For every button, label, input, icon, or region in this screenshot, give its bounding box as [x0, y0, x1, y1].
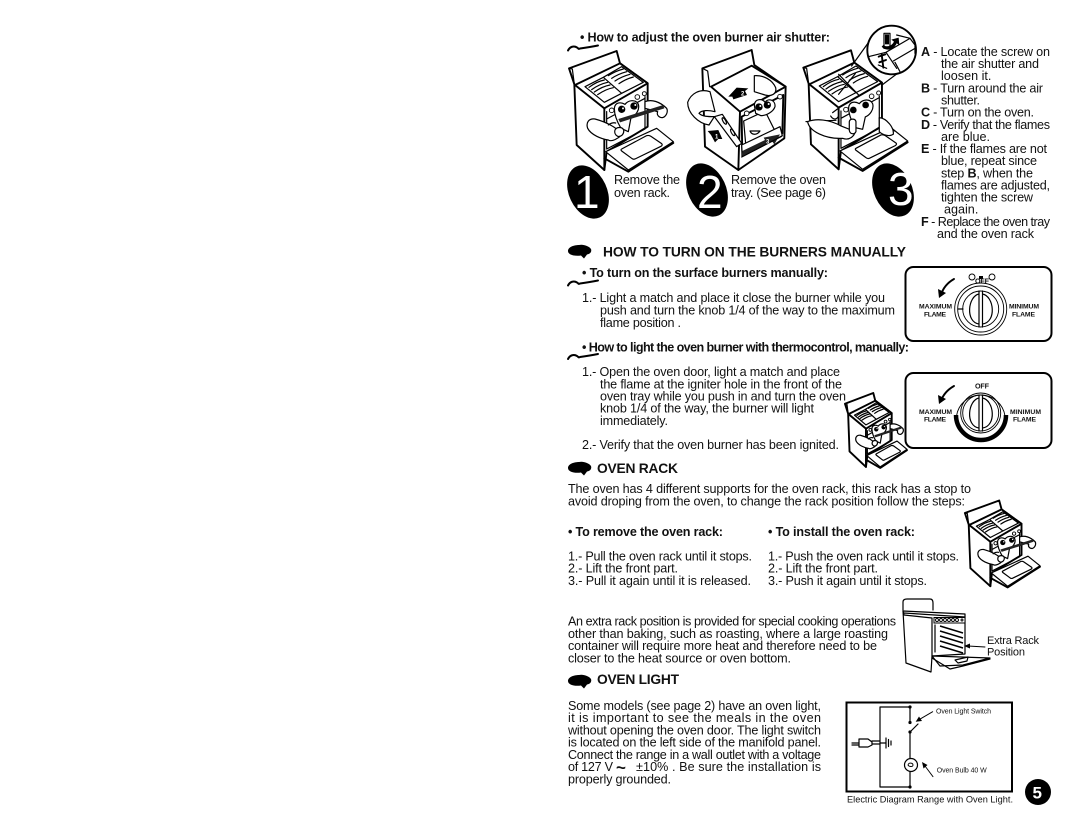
step 2 text: Remove the oven: [731, 173, 826, 187]
heading: burners manually: HOW TO TURN ON THE BURNERS MANUALLY: [603, 244, 906, 260]
step 1 text: [614, 173, 680, 200]
arrow 1: [708, 130, 722, 142]
knob panel: surface burner: FLAME: [1012, 312, 1035, 319]
instructions A to F: step B, when the: [941, 166, 1033, 180]
step 1 text: oven rack.: [614, 186, 670, 200]
knob panel: surface burner: FLAME: [924, 312, 946, 319]
knob panel: surface burner: [906, 267, 1052, 341]
step badge 3: 3: [888, 163, 914, 215]
oven light text: Connect the range in a wall outlet with a voltage: [568, 748, 821, 762]
knob panel: oven thermocontrol: FLAME: [1013, 417, 1036, 424]
column: remove the rack: • To remove the oven rack:: [568, 525, 723, 539]
oven rack intro: The oven has 4 different supports for the oven rack, this rack has a stop to: [568, 482, 971, 496]
instructions A to F: and the oven rack: [937, 227, 1035, 241]
extra rack text: An extra rack position is provided for special cooking operations: [568, 615, 896, 629]
plug: [852, 738, 891, 748]
instructions A to F: C - Turn on the oven.: [921, 106, 1034, 120]
diagram caption: Electric Diagram Range with Oven Light.: [847, 795, 1013, 805]
instructions A to F: shutter.: [941, 94, 980, 108]
knob panel: surface burner: OFF: [975, 276, 990, 286]
extra rack text: other than baking, such as roasting, where a large roasting: [568, 627, 888, 641]
heading: oven rack: OVEN RACK: [597, 461, 678, 476]
oven light text: [567, 699, 821, 786]
extra rack text: [568, 615, 896, 666]
column: install the rack: 1.- Push the oven rack until it stops.: [768, 550, 959, 564]
surface burners text: push and turn the knob 1/4 of the way to the maximum: [600, 304, 895, 318]
illustration: small oven: [845, 393, 907, 468]
column: remove the rack: 2.- Lift the front part.: [568, 562, 678, 576]
oven light text: properly grounded.: [568, 772, 671, 786]
heading: oven light: OVEN LIGHT: [597, 672, 680, 687]
oven rack intro: [568, 482, 971, 509]
instructions A to F: F - Replace the oven tray: [921, 215, 1051, 229]
illustration: oven step 2: 2: [741, 91, 745, 97]
knob panel: oven thermocontrol: OFF: [975, 382, 990, 390]
instructions A to F: blue, repeat since: [941, 154, 1037, 168]
instructions A to F: B - Turn around the air: [921, 82, 1043, 96]
illustration: oven step 2: 1: [715, 134, 719, 140]
instructions A to F: the air shutter and: [941, 57, 1039, 71]
instructions A to F: tighten the screw: [941, 191, 1034, 205]
step badge 1: 1: [574, 166, 600, 218]
subheading: air shutter: [568, 31, 830, 50]
heading: oven light: [568, 672, 680, 688]
bulb: [904, 758, 918, 772]
step 1 text: Remove the: [614, 173, 680, 187]
inset circle detail: [867, 26, 916, 74]
subheading: oven burner thermocontrol: • How to light the oven burner with thermocontrol, manually:: [582, 340, 909, 354]
oven light text: it is important to see the meals in the oven: [568, 711, 821, 725]
column: remove the rack: 3.- Pull it again until it is released.: [568, 574, 751, 588]
knob panel: oven thermocontrol: MAXIMUM: [919, 409, 952, 416]
illustration: oven step 3 with inset: [803, 50, 908, 171]
instructions A to F: D - Verify that the flames: [921, 118, 1050, 132]
illustration: oven step 2: [688, 50, 786, 170]
oven light text: without opening the oven door. The light switch: [567, 724, 821, 738]
column: install the rack: 2.- Lift the front part.: [768, 562, 878, 576]
electric diagram: Oven Bulb 40 W: [937, 768, 987, 775]
oven burner text: [582, 365, 846, 452]
step badge 1: [559, 159, 617, 225]
knob panel: surface burner: MINIMUM: [1009, 304, 1039, 311]
subheading: surface burners: [568, 266, 828, 286]
oven burner text: the flame at the igniter hole in the front of the: [600, 377, 842, 391]
oven burner text: immediately.: [600, 414, 668, 428]
surface burners text: [582, 291, 895, 330]
extra rack text: closer to the heat source or oven bottom.: [568, 652, 791, 666]
step 2 text: [731, 173, 826, 200]
electric diagram: Oven Light Switch: [936, 709, 991, 716]
subheading: air shutter: • How to adjust the oven burner air shutter:: [580, 31, 830, 45]
electric diagram: [846, 702, 1012, 792]
subheading: surface burners: • To turn on the surface burners manually:: [582, 266, 828, 280]
label: extra rack position: Position: [987, 647, 1025, 659]
surface burners text: flame position .: [600, 316, 681, 330]
knob panel: surface burner: MAXIMUM: [919, 304, 952, 311]
step badge 3: [864, 157, 922, 223]
oven light text: of 127 V: [568, 760, 614, 774]
knob panel: oven thermocontrol: [906, 373, 1052, 448]
oven light text: ~: [616, 758, 626, 777]
oven light text: Some models (see page 2) have an oven light,: [568, 699, 821, 713]
oven burner text: oven tray while you push in and turn the oven: [600, 390, 846, 404]
illustration: oven step 2: 3: [766, 140, 770, 146]
oven burner text: knob 1/4 of the way, the burner will light: [600, 402, 814, 416]
oven burner text: 2.- Verify that the oven burner has been ignited.: [582, 438, 839, 452]
illustration: oven step 1: [569, 51, 673, 172]
extra rack text: container will require more heat and therefore need to be: [568, 639, 877, 653]
step badge 2: 2: [697, 166, 723, 218]
instructions A to F: again.: [944, 203, 978, 217]
illustration: stove extra rack position: [903, 599, 990, 672]
knob panel: oven thermocontrol: FLAME: [924, 417, 946, 424]
instructions A to F: E - If the flames are not: [921, 142, 1048, 156]
instructions A to F: flames are adjusted,: [941, 178, 1050, 192]
page number badge: 5: [1032, 783, 1042, 802]
surface burners text: 1.- Light a match and place it close the burner while you: [582, 291, 885, 305]
illustration: oven with rack: [965, 501, 1040, 587]
column: install the rack: 3.- Push it again until it stops.: [768, 574, 927, 588]
oven light text: is located on the left side of the manifold panel.: [568, 736, 821, 750]
instructions A to F: are blue.: [941, 130, 990, 144]
knob panel: oven thermocontrol: MINIMUM: [1010, 409, 1041, 416]
label: extra rack position: Extra Rack: [987, 635, 1040, 647]
column: install the rack: • To install the oven rack:: [768, 525, 915, 539]
step 2 text: tray. (See page 6): [731, 186, 826, 200]
instructions A to F: loosen it.: [941, 69, 991, 83]
arrow 2: [728, 88, 748, 99]
page number badge: [1025, 779, 1051, 805]
oven light text: ±10% . Be sure the installation is: [636, 760, 821, 774]
oven rack intro: avoid droping from the oven, to change the rack position follow the steps:: [568, 495, 965, 509]
oven burner text: 1.- Open the oven door, light a match and place: [582, 365, 840, 379]
instructions A to F: [921, 45, 1051, 241]
column: install the rack: [768, 525, 959, 588]
inset leader lines: [852, 38, 902, 85]
column: remove the rack: [568, 525, 752, 588]
label: extra rack position: [987, 635, 1040, 659]
instructions A to F: A - Locate the screw on: [921, 45, 1050, 59]
column: remove the rack: 1.- Pull the oven rack until it stops.: [568, 550, 752, 564]
step badge 2: [678, 157, 736, 223]
